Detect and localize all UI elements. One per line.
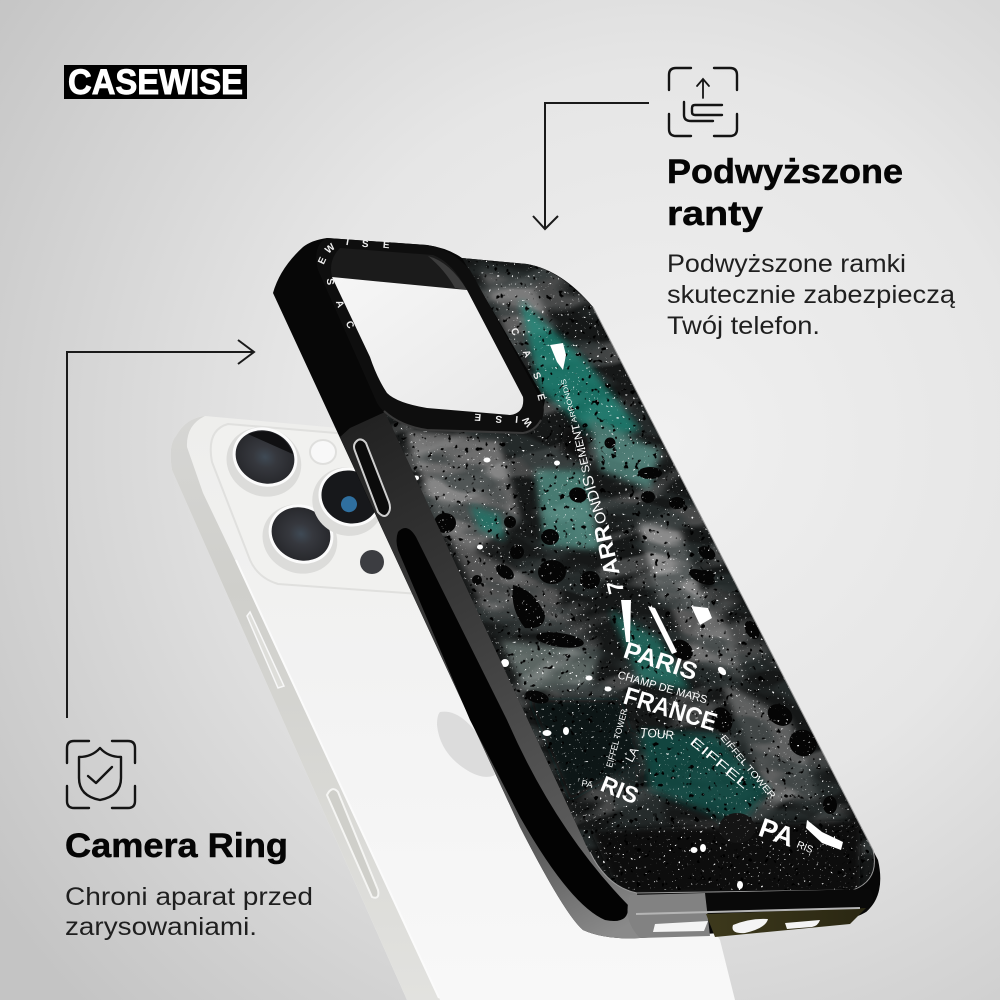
ring lettering: E	[534, 393, 547, 402]
tower typography: ONDIS	[579, 473, 611, 526]
tower typography: PARIS	[620, 637, 701, 686]
lens top	[215, 415, 312, 508]
ring lettering: I	[345, 237, 350, 248]
inner bevel	[331, 248, 467, 290]
tower typography: TOUR	[640, 725, 675, 743]
bottom edge	[697, 889, 873, 912]
icon: raised edges	[669, 68, 737, 136]
case body	[273, 238, 880, 938]
tower typography	[560, 378, 815, 856]
black case	[273, 238, 880, 938]
tower typography: FRANCE	[620, 682, 720, 737]
side button	[354, 439, 390, 516]
arrow: raised edges	[533, 103, 649, 229]
lens bottom	[251, 492, 348, 585]
ring lettering: E	[382, 240, 390, 251]
ring lettering: A	[520, 348, 533, 360]
icon: shield	[67, 741, 135, 808]
tower typography: RIS	[795, 840, 815, 856]
ring lettering: C	[508, 326, 521, 338]
tower typography: EIFFEL TOWER	[604, 708, 630, 769]
ring lettering	[316, 237, 547, 428]
apple logo	[437, 712, 495, 777]
sensor	[360, 550, 384, 574]
heading: raised edges: Podwyższone	[667, 153, 903, 191]
lens right	[301, 456, 395, 547]
flash	[310, 440, 336, 464]
tower typography: PA	[581, 778, 594, 790]
tower typography: ARRONDIS	[560, 378, 579, 423]
ring lettering: C	[343, 319, 356, 331]
camera island	[211, 424, 420, 594]
tower typography: CHAMP DE MARS	[616, 669, 709, 706]
ring lettering: W	[520, 414, 535, 428]
text: raised edges description: Twój telefon.	[667, 312, 820, 340]
text: raised edges description: skutecznie zabezpieczą	[667, 281, 955, 309]
tower typography: EIFFEL	[687, 734, 752, 792]
heading: raised edges	[667, 153, 903, 233]
tower typography: 7 ARR	[589, 523, 629, 596]
phone side band	[171, 416, 440, 1000]
ring lettering: E	[316, 255, 329, 266]
tower typography: RIS	[597, 771, 642, 809]
text: camera ring description: Chroni aparat przed	[65, 883, 313, 911]
logo: CASEWISE	[68, 63, 243, 102]
ring lettering: I	[515, 413, 519, 424]
white phone behind the case	[171, 415, 735, 1000]
tower typography: LA	[622, 745, 642, 764]
ring lettering: E	[474, 411, 482, 422]
arrow: camera ring	[67, 340, 254, 718]
screen rim highlight	[590, 307, 874, 893]
camera window	[332, 277, 523, 415]
ring lettering: W	[323, 241, 338, 256]
tower typography: PA	[755, 812, 799, 853]
heading: raised edges: ranty	[667, 195, 763, 233]
phone back	[171, 416, 735, 1000]
ink blobs	[434, 438, 837, 843]
text: raised edges description: Podwyższone ramki	[667, 250, 906, 278]
side buttons	[247, 612, 378, 898]
camera ring	[316, 237, 547, 433]
heading: camera ring: Camera Ring	[65, 827, 288, 865]
text: camera ring description: zarysowaniami.	[65, 913, 257, 941]
ring lettering: S	[530, 371, 543, 382]
port openings	[653, 919, 820, 933]
case side gloss	[340, 412, 640, 938]
ring lettering: A	[333, 299, 346, 309]
dark side pill	[396, 528, 628, 921]
white splashes	[413, 343, 843, 889]
ring lettering: S	[495, 413, 503, 424]
tower typography: SEMENT	[570, 422, 593, 474]
tower typography: EIFFEL TOWER	[718, 733, 778, 801]
text: camera ring description	[65, 883, 313, 941]
text: raised edges description	[667, 250, 955, 340]
screen art	[386, 258, 874, 892]
ring lettering: S	[324, 278, 335, 286]
ring lettering: S	[361, 239, 369, 250]
